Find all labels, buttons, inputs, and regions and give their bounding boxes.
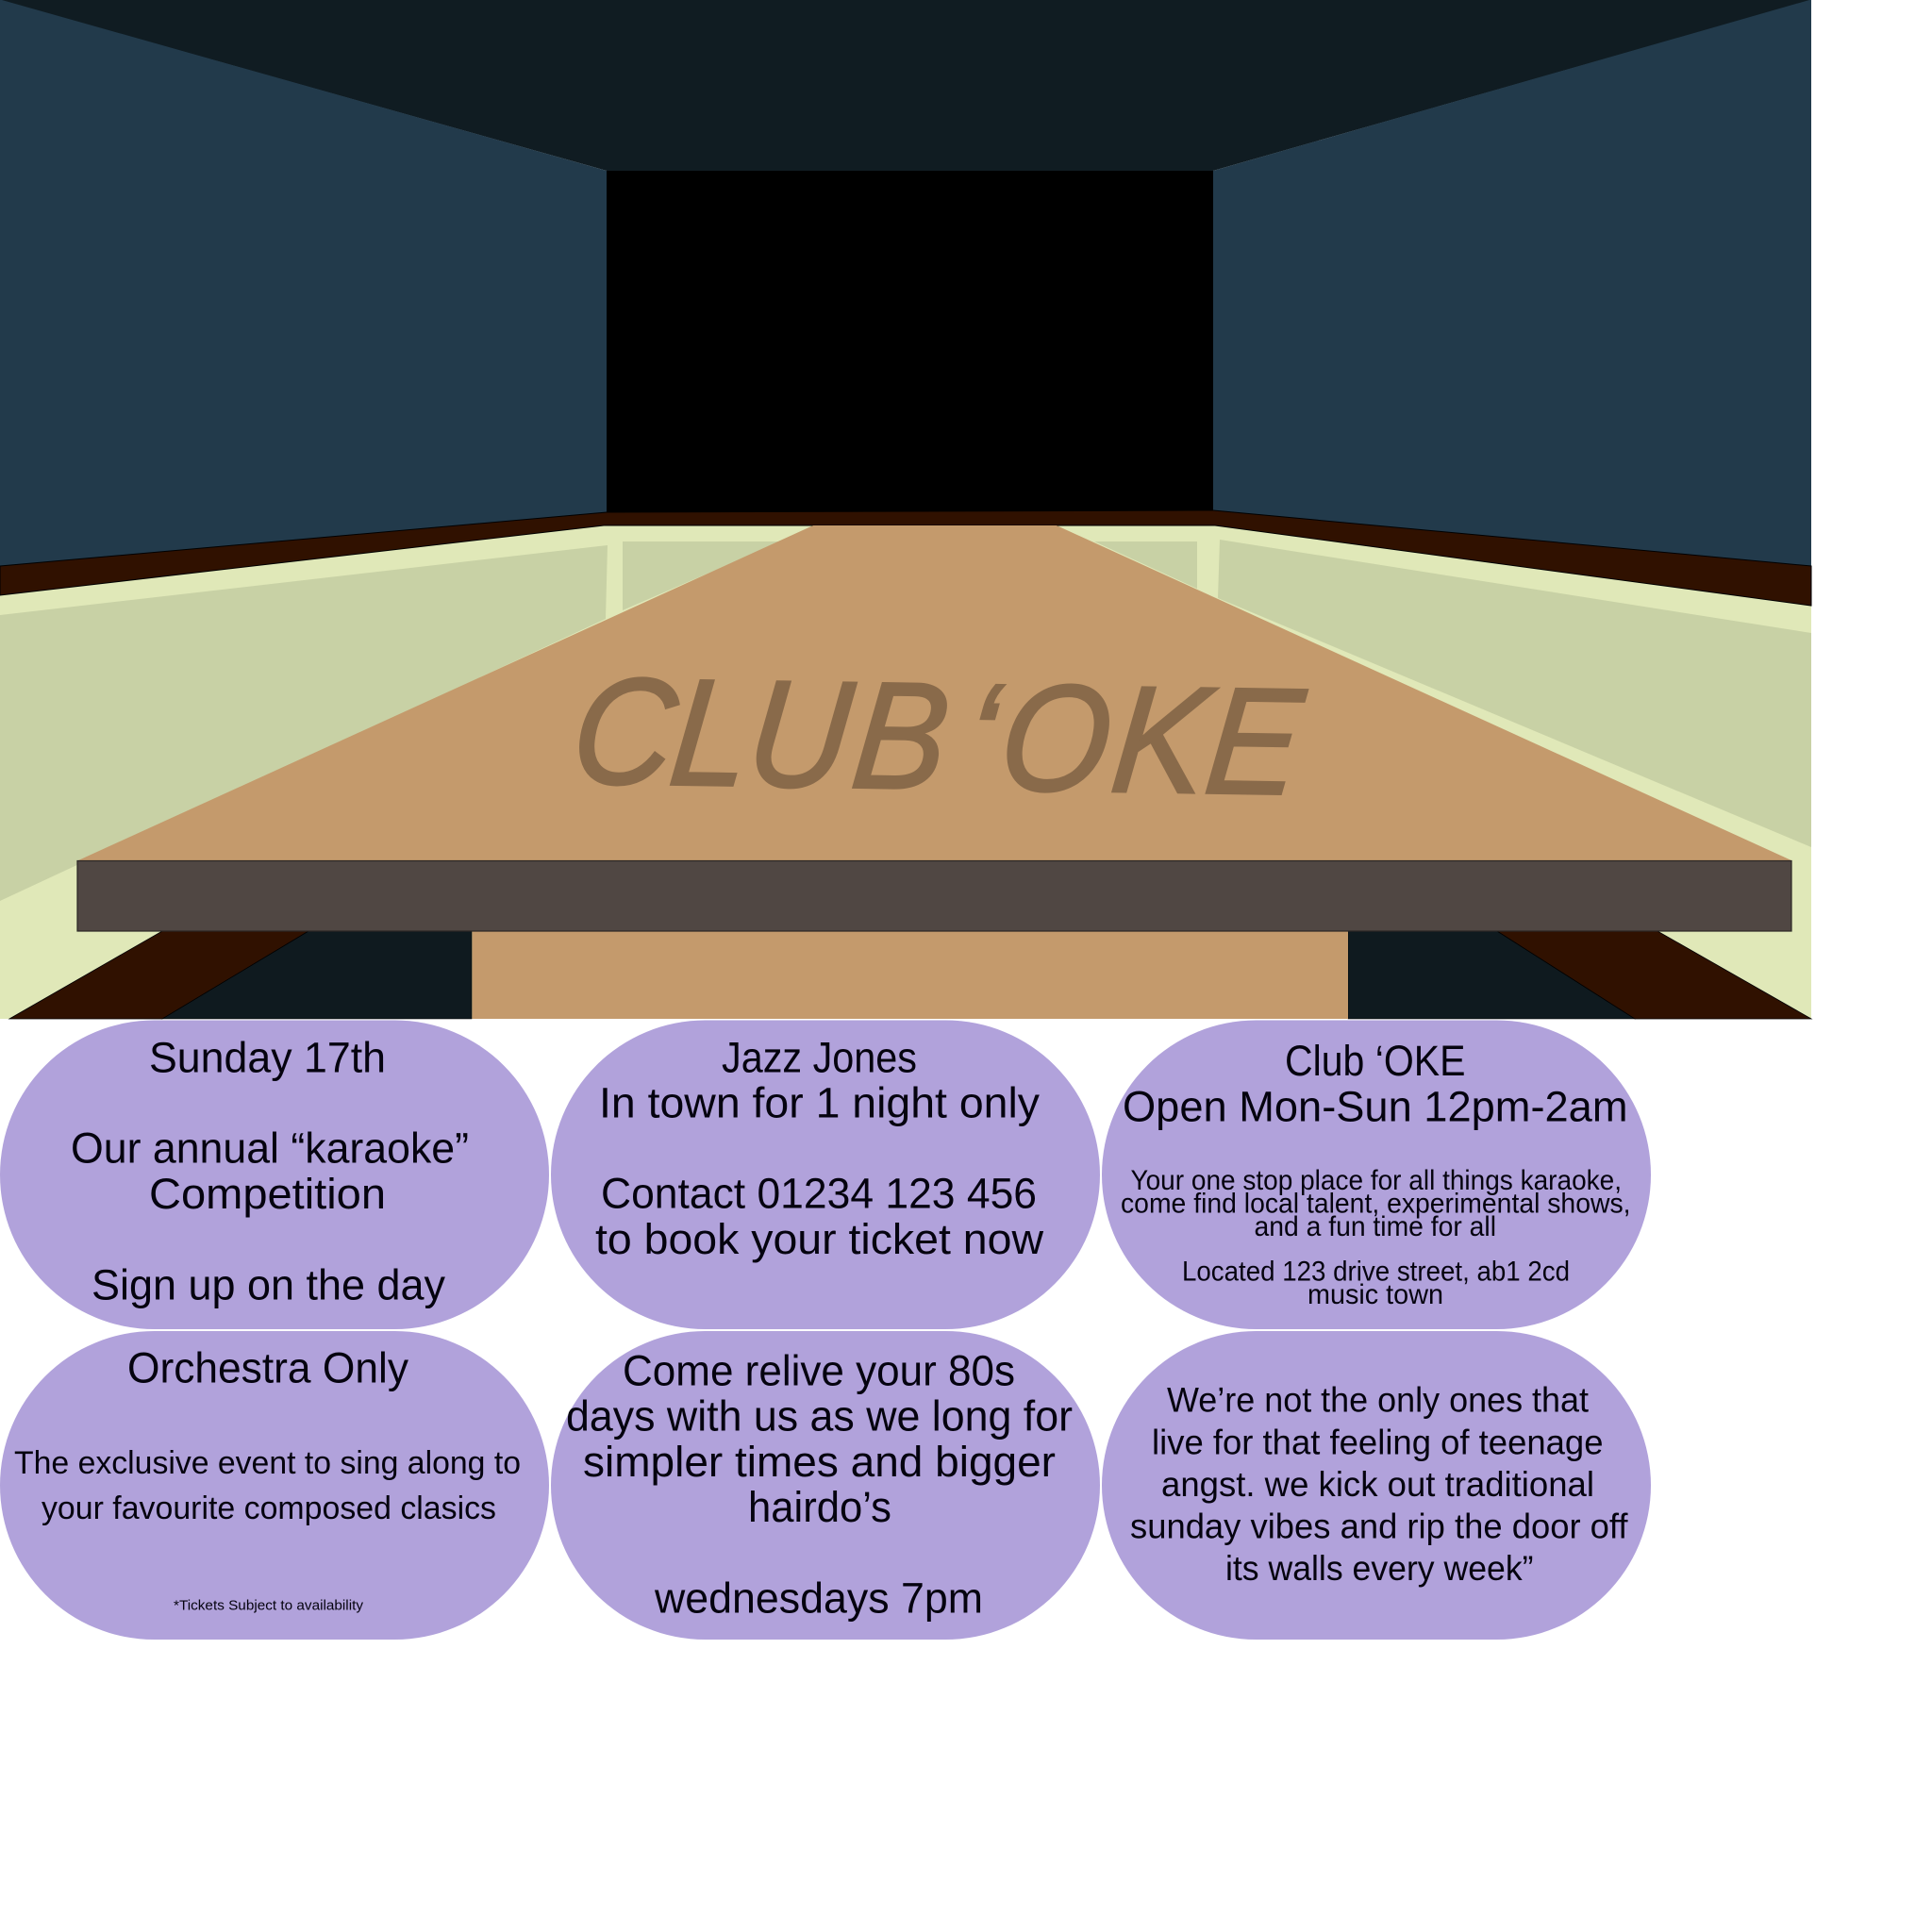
pill — [551, 1331, 1100, 1640]
right brown leg — [1497, 931, 1811, 1019]
right wall — [1213, 0, 1811, 566]
description: Come relive your 80s — [623, 1347, 1015, 1394]
heading: Orchestra Only — [127, 1343, 408, 1392]
back doorway — [607, 171, 1213, 512]
table top — [77, 525, 1792, 860]
right back floor panel — [1094, 541, 1197, 589]
table base — [472, 931, 1348, 1019]
quote text: sunday vibes and rip the door off — [1130, 1507, 1628, 1545]
floor base — [0, 509, 1811, 1019]
panel: jazz jones — [551, 1021, 1100, 1329]
pill — [1102, 1021, 1651, 1329]
quote text — [1130, 1381, 1628, 1588]
booking details: to book your ticket now — [595, 1215, 1044, 1263]
address — [1182, 1257, 1570, 1310]
left brown leg — [9, 931, 308, 1019]
description: and a fun time for all — [1255, 1211, 1496, 1242]
competition name: Our annual “karaoke” — [71, 1124, 469, 1172]
quote text: live for that feeling of teenage — [1152, 1423, 1604, 1462]
description: The exclusive event to sing along to — [14, 1445, 521, 1481]
address: Located 123 drive street, ab1 2cd — [1182, 1257, 1570, 1288]
heading: Open Mon-Sun 12pm-2am — [1123, 1083, 1628, 1130]
pill — [0, 1021, 549, 1329]
address: music town — [1307, 1279, 1443, 1310]
panel: club info — [1102, 1021, 1651, 1329]
right table leg dark — [1348, 931, 1635, 1019]
quote text: angst. we kick out traditional — [1161, 1465, 1594, 1504]
table front — [77, 860, 1791, 931]
description: your favourite composed clasics — [42, 1491, 496, 1526]
quote text: its walls every week” — [1225, 1549, 1534, 1588]
stage scene illustration — [0, 0, 1811, 1019]
description: Your one stop place for all things karaoke, — [1130, 1165, 1622, 1196]
footnote: *Tickets Subject to availability — [174, 1598, 364, 1613]
competition name: Competition — [149, 1170, 386, 1218]
heading — [1123, 1037, 1628, 1130]
pill — [551, 1021, 1100, 1329]
description: hairdo’s — [748, 1483, 891, 1531]
heading: In town for 1 night only — [599, 1079, 1041, 1127]
panel: orchestra only — [0, 1331, 549, 1640]
description: days with us as we long for — [566, 1392, 1073, 1440]
sign up note: Sign up on the day — [92, 1260, 445, 1309]
club name on table: CLUB‘OKE — [565, 646, 1311, 826]
panel: quote — [1102, 1331, 1651, 1640]
left table leg dark — [162, 931, 472, 1019]
right floor panel — [1218, 540, 1811, 847]
description — [566, 1347, 1073, 1531]
description — [14, 1445, 521, 1526]
description: simpler times and bigger — [583, 1438, 1056, 1486]
heading: Jazz Jones — [722, 1034, 917, 1081]
left wall — [0, 0, 607, 566]
booking details: Contact 01234 123 456 — [601, 1170, 1037, 1217]
booking details — [595, 1170, 1044, 1263]
description: come find local talent, experimental shows, — [1121, 1189, 1630, 1219]
skirting strip — [0, 510, 1811, 606]
panel: sunday competition — [0, 1021, 549, 1329]
competition name — [71, 1124, 469, 1218]
schedule: wednesdays 7pm — [654, 1574, 983, 1623]
left back floor panel — [623, 541, 781, 610]
pill — [0, 1331, 549, 1640]
ceiling — [0, 0, 1811, 171]
pill — [1102, 1331, 1651, 1640]
heading: Sunday 17th — [149, 1034, 386, 1081]
panel: 80s night — [551, 1331, 1100, 1640]
description — [1121, 1165, 1630, 1242]
heading: Club ‘OKE — [1285, 1037, 1466, 1085]
quote text: We’re not the only ones that — [1167, 1381, 1590, 1419]
heading — [599, 1034, 1041, 1127]
left floor panel — [0, 545, 608, 901]
